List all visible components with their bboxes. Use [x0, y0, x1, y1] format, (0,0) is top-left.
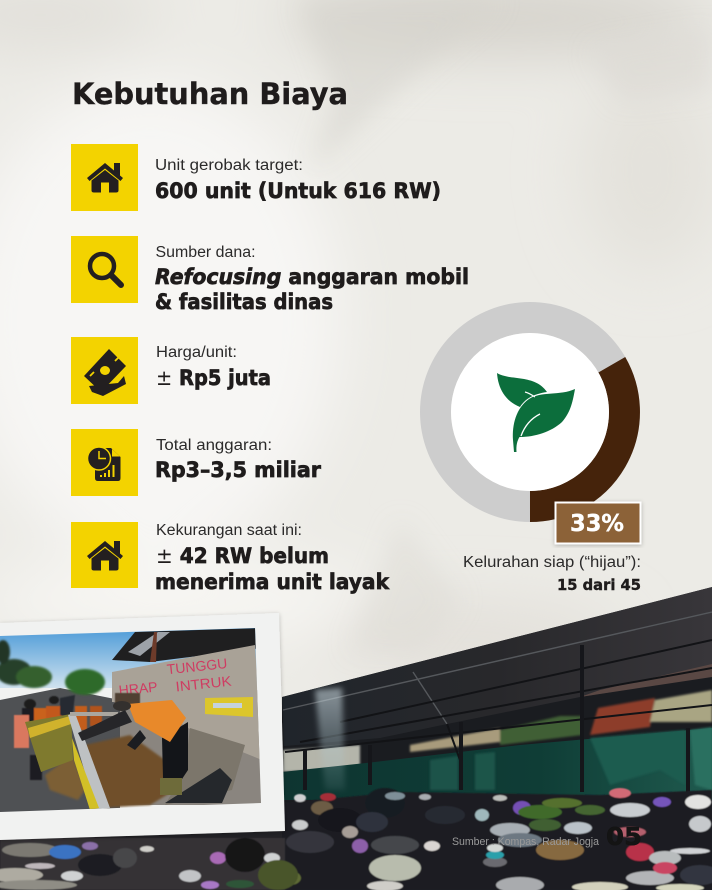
icon: banknotes	[71, 337, 138, 404]
item: kekurangan saat ini	[71, 522, 390, 594]
roof	[282, 587, 712, 746]
photo: waste depot with roof and garbage	[0, 580, 712, 890]
icon: report document	[71, 429, 138, 496]
left part of the heap below frame	[0, 838, 285, 890]
caption: kelurahan siap	[463, 554, 641, 594]
item: harga per unit: Harga/unit:	[156, 344, 237, 361]
yellow sign	[205, 697, 253, 717]
item: unit gerobak target: 600 unit (Untuk 616 RW)	[155, 179, 441, 203]
sky	[0, 628, 262, 688]
icon: house	[71, 522, 138, 588]
item: unit gerobak target: Unit gerobak target:	[155, 157, 303, 174]
icon: house	[71, 144, 138, 211]
caption: kelurahan siap: 15 dari 45	[557, 576, 641, 594]
item: sumber dana: Sumber dana:	[156, 244, 256, 261]
donut chart: kelurahan siap 33%	[436, 318, 640, 544]
crowd	[14, 693, 140, 780]
badge: 33%: 33%	[570, 511, 624, 537]
badge: 33%	[556, 502, 640, 544]
item: unit gerobak target	[71, 144, 441, 211]
item: total anggaran: Rp3–3,5 miliar	[155, 458, 322, 482]
item: sumber dana: & fasilitas dinas	[155, 290, 333, 314]
icon: green leaves	[497, 373, 575, 452]
background strip behind roof	[283, 690, 712, 772]
green wall	[282, 728, 712, 800]
item: kekurangan saat ini: ± 42 RW belum	[156, 544, 329, 568]
page number: 05	[606, 822, 642, 851]
item: total anggaran	[71, 429, 322, 496]
depot roof	[112, 628, 262, 662]
banner scrawl: HRAP	[118, 678, 158, 698]
street	[0, 688, 120, 815]
item: kekurangan saat ini: menerima unit layak	[155, 570, 390, 594]
item: kekurangan saat ini: Kekurangan saat ini:	[156, 522, 302, 539]
sunlight beam	[315, 688, 345, 790]
source note: Sumber : Kompas, Radar Jogja	[452, 836, 600, 848]
worker	[162, 722, 188, 782]
trees	[0, 640, 105, 695]
caption: kelurahan siap: Kelurahan siap (“hijau”):	[463, 554, 641, 571]
photo frame: workers loading waste cart	[0, 613, 285, 840]
item: harga per unit	[71, 337, 271, 404]
item: sumber dana: Refocusing anggaran mobil	[155, 265, 469, 289]
banner scrawl	[119, 658, 232, 694]
waste pile	[85, 735, 175, 808]
title: Kebutuhan Biaya	[72, 77, 348, 111]
banner scrawl: INTRUK	[175, 673, 233, 694]
metal tailgate	[165, 728, 245, 805]
item: total anggaran: Total anggaran:	[156, 437, 272, 454]
item: harga per unit: ± Rp5 juta	[156, 366, 271, 390]
garbage heap	[0, 788, 712, 890]
item: sumber dana	[71, 236, 469, 314]
banner scrawl: TUNGGU	[166, 655, 228, 677]
banner	[112, 645, 262, 760]
icon: magnifying glass	[71, 236, 138, 303]
yellow cart	[25, 714, 73, 772]
